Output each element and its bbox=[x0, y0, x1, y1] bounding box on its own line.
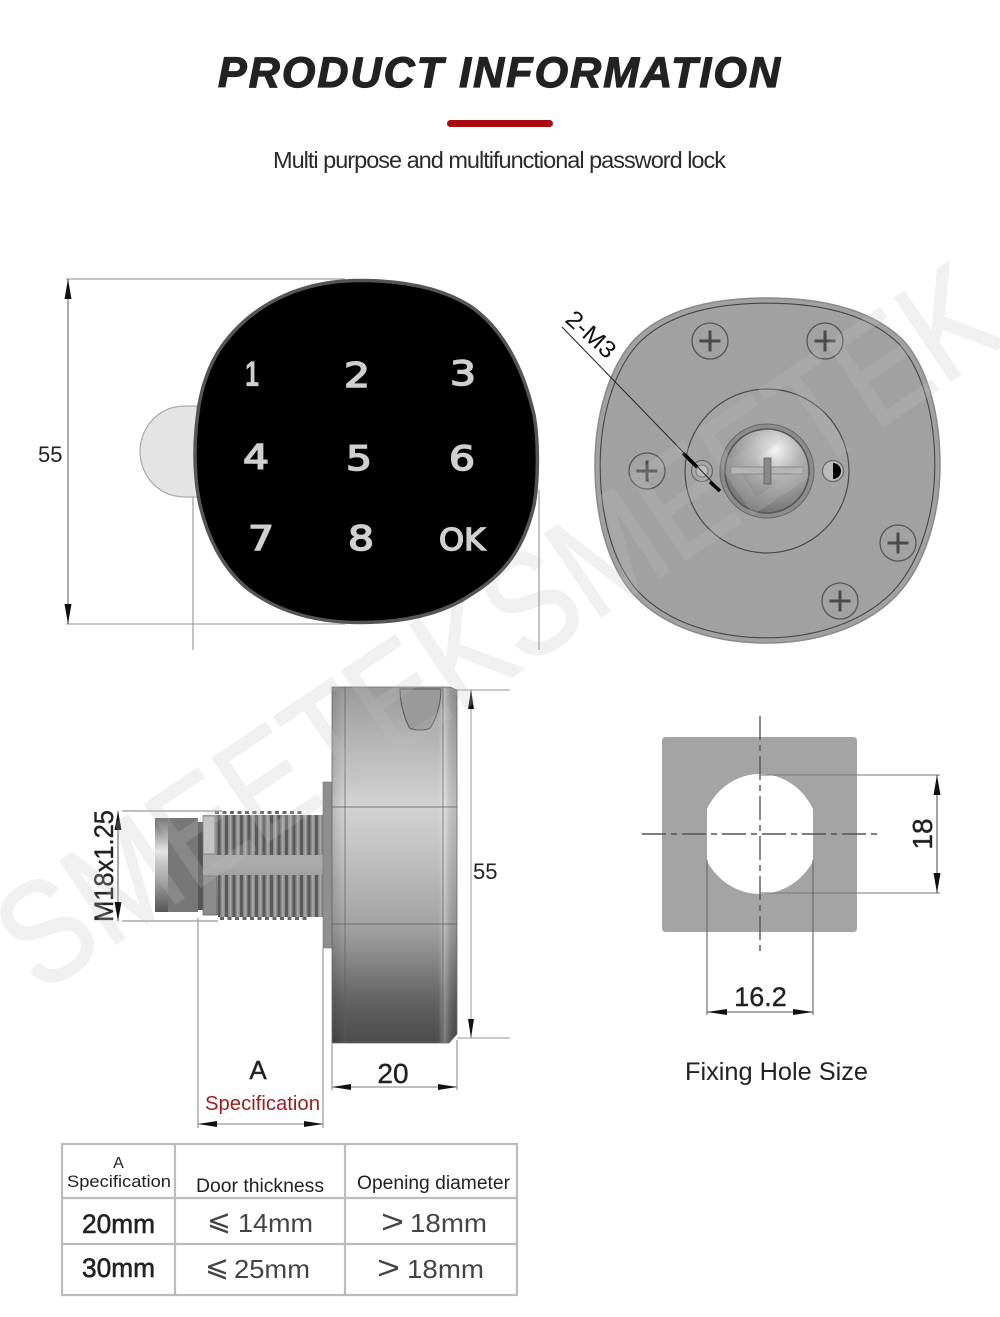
keypad digits bbox=[243, 354, 486, 559]
table row: 20mm: 20mm bbox=[82, 1209, 155, 1239]
keypad digits: 5 bbox=[346, 439, 372, 479]
lock cylinder bbox=[720, 424, 814, 518]
dimension: front height 55: 55 bbox=[38, 442, 62, 467]
rear view: mounting plate bbox=[560, 298, 940, 643]
table row: 20mm bbox=[82, 1203, 487, 1240]
table header: Door thickness bbox=[196, 1176, 324, 1197]
keypad digits: 7 bbox=[248, 519, 274, 559]
dimension: depth 20 bbox=[332, 1040, 457, 1090]
dimension: 18 bbox=[760, 775, 940, 893]
table row: 20mm: > bbox=[381, 1203, 404, 1240]
table row: 30mm: > bbox=[377, 1249, 400, 1286]
keypad digits: OK bbox=[439, 523, 486, 558]
keypad digits: 1 bbox=[245, 355, 259, 394]
dimension: A specification: Specification bbox=[205, 1093, 320, 1115]
keypad body bbox=[195, 280, 537, 622]
keypad digits: 4 bbox=[243, 438, 269, 478]
table row: 30mm: 18mm bbox=[407, 1254, 484, 1284]
dimension: depth 20: 20 bbox=[377, 1058, 409, 1089]
table row: 20mm: 18mm bbox=[410, 1208, 487, 1238]
hub ring bbox=[685, 389, 849, 553]
table row: 30mm: 30mm bbox=[82, 1253, 155, 1283]
table header bbox=[67, 1155, 511, 1197]
dimension: A specification bbox=[198, 918, 323, 1128]
plate inner edge bbox=[600, 303, 935, 638]
table row: 20mm: 14mm bbox=[238, 1208, 313, 1238]
dimension: side height 55 bbox=[457, 690, 510, 1038]
plate with hole bbox=[662, 737, 857, 932]
keypad digits: 2 bbox=[344, 356, 370, 396]
table row: 30mm: 25mm bbox=[234, 1254, 310, 1284]
table header: Specification bbox=[67, 1172, 171, 1191]
dimension: front height 55 bbox=[38, 279, 539, 650]
drum body bbox=[332, 687, 457, 1043]
dimension: 18: 18 bbox=[907, 818, 938, 850]
table row: 30mm: ⩽ bbox=[205, 1249, 229, 1283]
dimension: thread M18x1.25 bbox=[89, 810, 222, 922]
red accent bar bbox=[447, 120, 553, 127]
title: PRODUCT INFORMATION bbox=[218, 49, 781, 97]
keypad digits: 6 bbox=[449, 439, 475, 479]
table row: 20mm: ⩽ bbox=[207, 1203, 231, 1237]
flange bbox=[323, 782, 332, 948]
table grid bbox=[62, 1144, 517, 1295]
dimension: thread M18x1.25: M18x1.25 bbox=[89, 810, 119, 922]
threaded shaft bbox=[203, 812, 323, 918]
label: 2-M3 leader bbox=[560, 305, 720, 491]
screws bbox=[629, 323, 916, 619]
dimension: 16.2 bbox=[707, 860, 813, 1015]
fixing hole diagram bbox=[642, 716, 940, 1086]
side view: lock with thread bbox=[89, 687, 510, 1128]
icon: lock cam behind keypad bbox=[140, 406, 197, 497]
dimension: A specification: A bbox=[249, 1055, 267, 1085]
label: 2-M3 leader: 2-M3 bbox=[560, 305, 621, 364]
spec table bbox=[62, 1144, 517, 1295]
dimension: 16.2: 16.2 bbox=[734, 982, 787, 1012]
front view: keypad lock bbox=[38, 279, 539, 650]
head of cylinder bbox=[155, 818, 203, 912]
table row: 30mm bbox=[82, 1249, 484, 1286]
caption: Fixing Hole Size bbox=[685, 1058, 868, 1086]
battery slot bbox=[400, 689, 441, 730]
keypad digits: 8 bbox=[348, 519, 374, 559]
centre lines bbox=[642, 716, 878, 952]
plate body bbox=[595, 298, 940, 643]
mounting holes bbox=[692, 460, 844, 482]
subtitle: Multi purpose and multifunctional password lock bbox=[273, 147, 726, 173]
table header: Opening diameter bbox=[357, 1173, 511, 1194]
table header: A bbox=[113, 1155, 124, 1172]
keypad digits: 3 bbox=[450, 354, 476, 394]
dimension: side height 55: 55 bbox=[473, 859, 497, 884]
